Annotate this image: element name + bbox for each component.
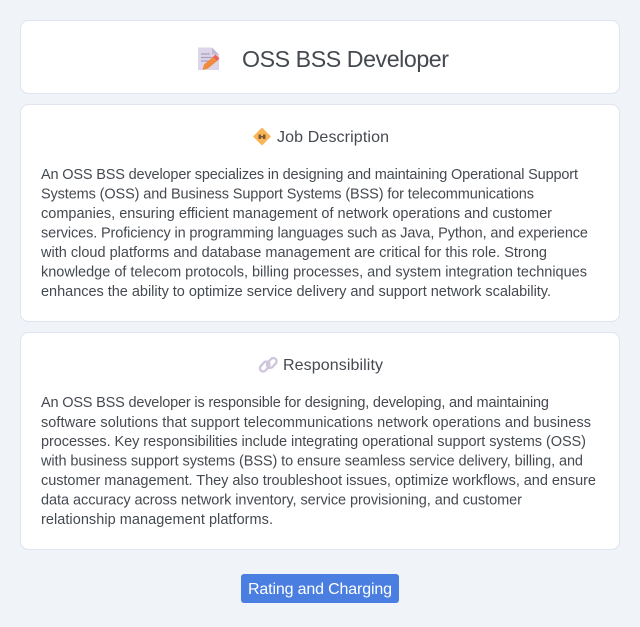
text block: responsibility: processes. Key responsibilities include integrating operational support systems (OSS) xyxy=(41,434,586,450)
icon: document with pencil xyxy=(198,48,220,70)
text block: responsibility: data accuracy across network inventory, service provisioning, and customer xyxy=(41,492,522,508)
icon: chain link xyxy=(259,357,278,373)
text block: job description: services. Proficiency in programming languages such as Java, Python, and experience xyxy=(41,226,588,242)
heading: responsibility: Responsibility xyxy=(283,357,383,374)
panel: title header xyxy=(20,20,620,94)
text block: job description: with cloud platforms and database management are critical for this role. Strong xyxy=(40,245,547,261)
button: rating and charging xyxy=(241,574,399,603)
text block: job description: An OSS BSS developer specializes in designing and maintaining Operational Support xyxy=(41,167,578,183)
button: rating and charging: Rating and Charging xyxy=(248,581,392,598)
text block: responsibility xyxy=(40,395,596,528)
text block: responsibility: with business support systems (BSS) to ensure seamless service delivery, billing, and xyxy=(40,454,583,470)
text block: job description: enhances the ability to optimize service delivery and support network scalability. xyxy=(41,284,551,300)
text block: responsibility: customer management. They also troubleshoot issues, optimize workflows, and ensure xyxy=(41,473,596,489)
text block: responsibility: relationship management platforms. xyxy=(41,512,273,528)
text block: job description xyxy=(40,167,588,300)
panel: responsibility xyxy=(20,332,620,550)
text block: job description: companies, ensuring efficient management of network operations and customer xyxy=(41,206,552,222)
text block: responsibility: An OSS BSS developer is responsible for designing, developing, and maintaining xyxy=(41,395,549,411)
text block: job description: knowledge of telecom protocols, billing processes, and system integration techniques xyxy=(41,264,587,280)
text block: responsibility: software solutions that support telecommunications network operations and business xyxy=(41,415,591,431)
title: OSS BSS Developer xyxy=(242,46,449,72)
heading: job description: Job Description xyxy=(277,129,389,146)
panel: job description xyxy=(20,104,620,322)
icon: orange diamond xyxy=(254,128,270,144)
text block: job description: Systems (OSS) and Business Support Systems (BSS) for telecommunications xyxy=(41,186,534,202)
